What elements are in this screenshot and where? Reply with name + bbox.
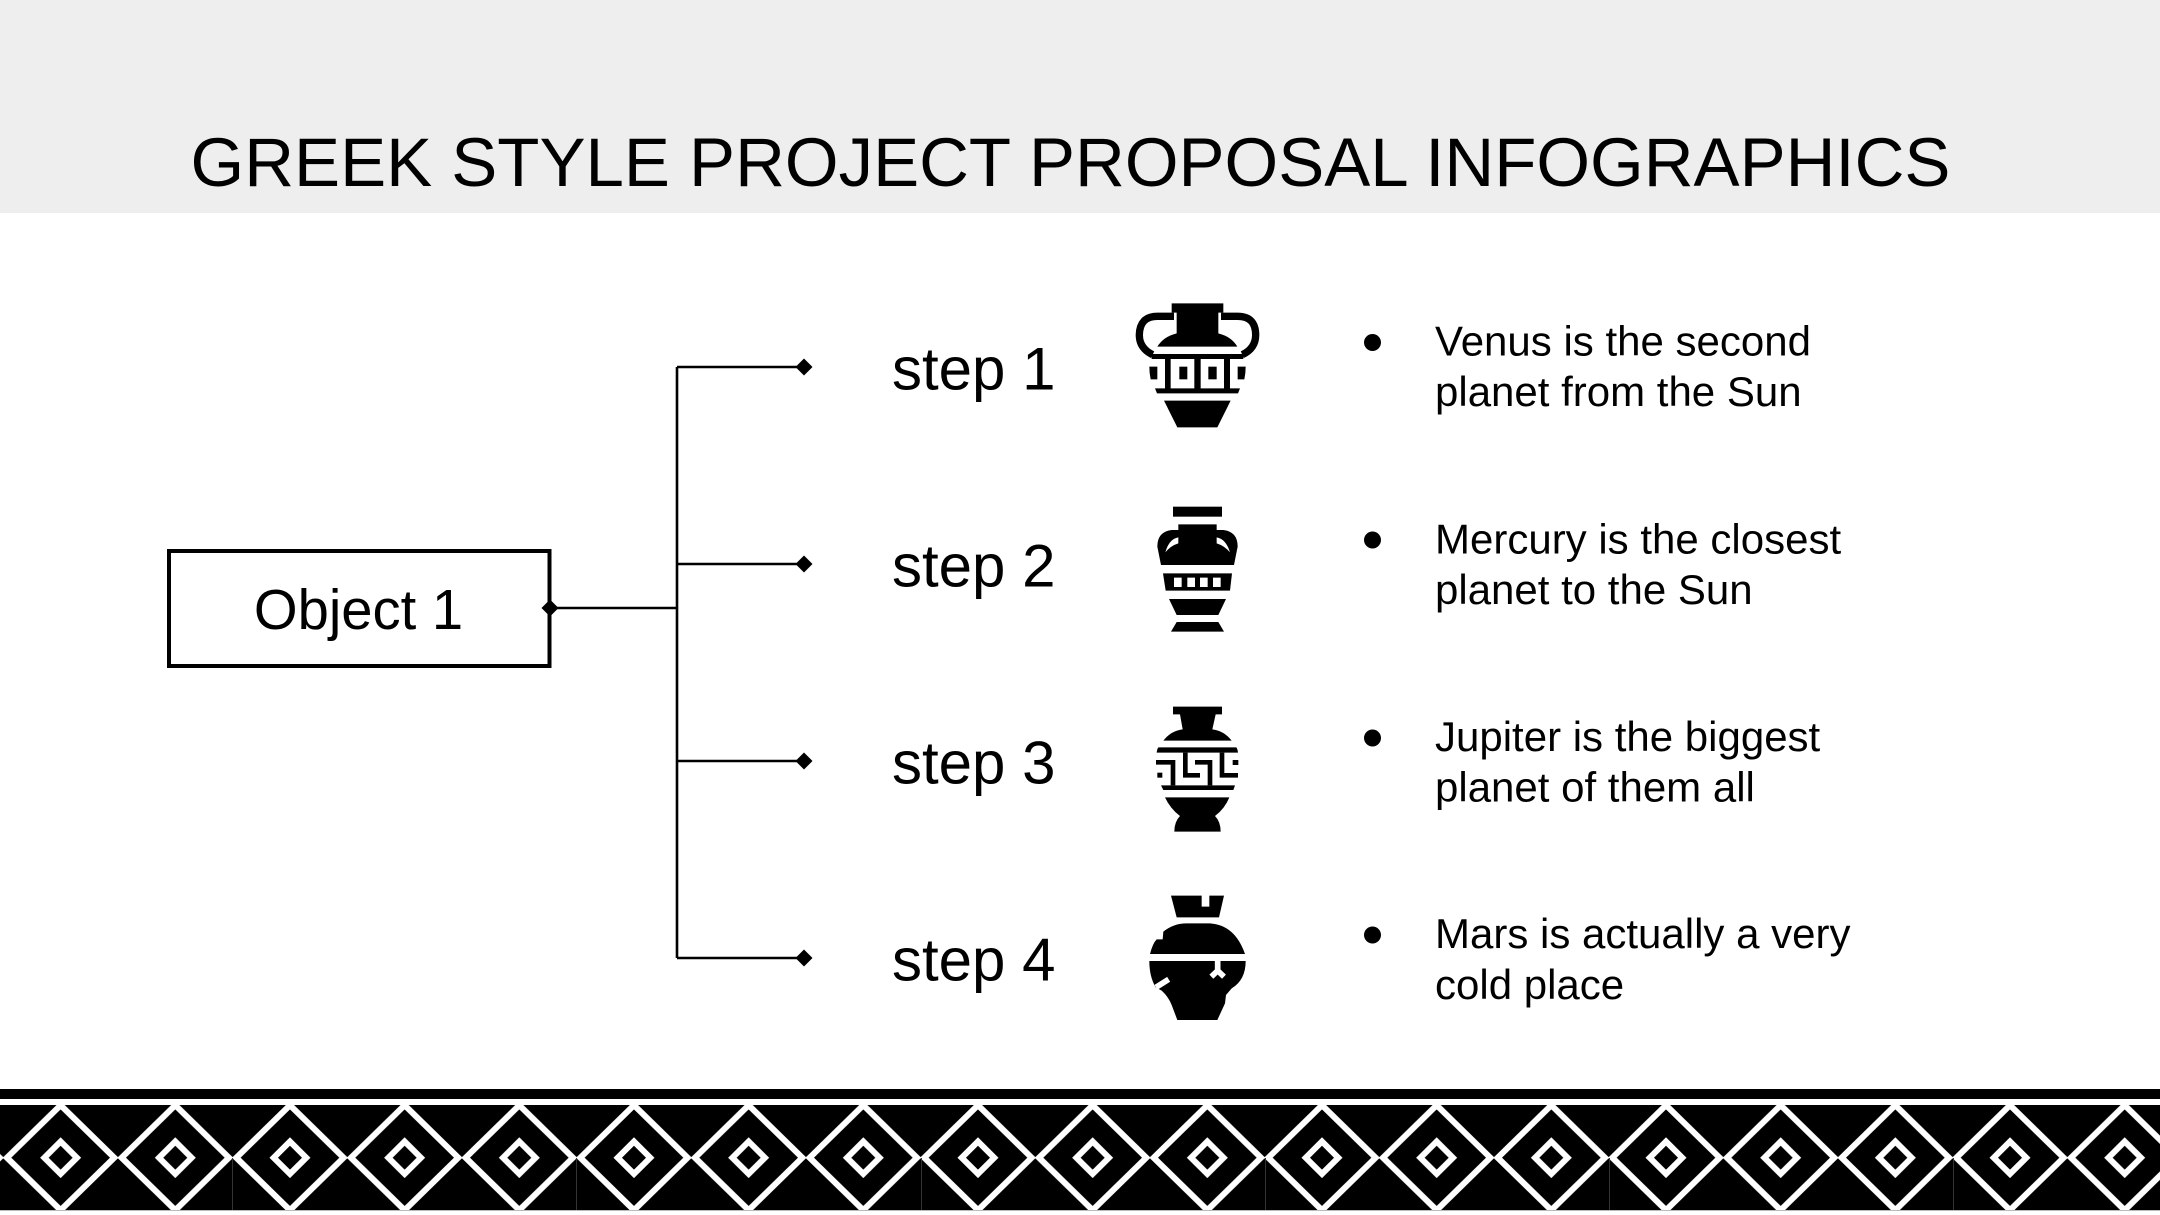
footer greek border xyxy=(0,1089,2160,1211)
icon: two-handled amphora xyxy=(1139,303,1256,427)
icon: vase with greek key xyxy=(1156,707,1238,832)
bullet list: planet of them all xyxy=(1435,764,1755,810)
bullet list xyxy=(1364,318,1850,1008)
step labels: step 2 xyxy=(892,532,1055,600)
icon: slim amphora with squares xyxy=(1157,507,1238,632)
bullet list: cold place xyxy=(1435,961,1624,1008)
bullet list: Jupiter is the biggest xyxy=(1435,713,1821,760)
icon: cracked vase xyxy=(1149,896,1246,1020)
step labels: step 4 xyxy=(892,926,1055,994)
header band xyxy=(0,0,2160,213)
bullet list: planet from the Sun xyxy=(1435,368,1802,415)
bullet list: Venus is the second xyxy=(1435,318,1811,364)
object box: Object 1 xyxy=(254,578,463,641)
bullet list: Mars is actually a very xyxy=(1435,910,1850,957)
object box xyxy=(169,551,550,666)
bullet list: Mercury is the closest xyxy=(1435,516,1841,562)
title: GREEK STYLE PROJECT PROPOSAL INFOGRAPHICS xyxy=(191,124,1950,201)
step labels: step 1 xyxy=(892,336,1055,402)
connector tree xyxy=(542,358,812,966)
step labels: step 3 xyxy=(892,730,1055,796)
bullet list: planet to the Sun xyxy=(1435,566,1753,613)
step labels xyxy=(892,336,1055,994)
